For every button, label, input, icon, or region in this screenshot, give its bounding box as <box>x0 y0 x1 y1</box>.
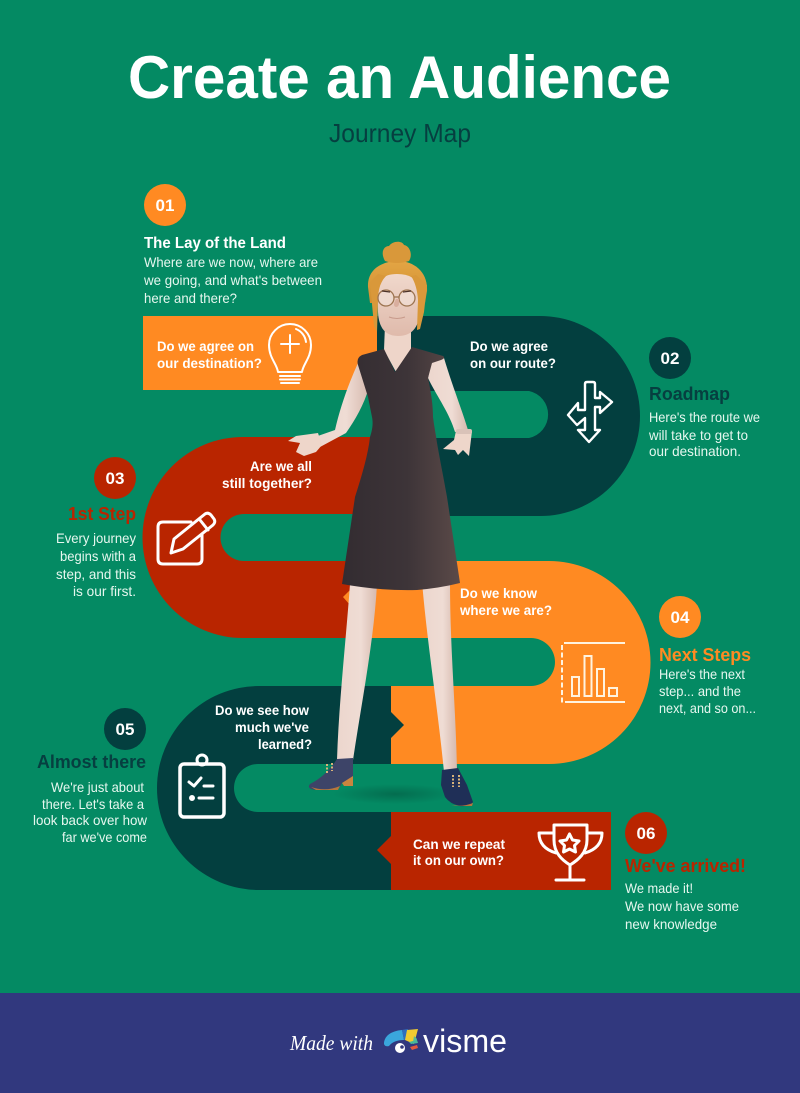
hair strands <box>370 274 427 332</box>
eyes and nose <box>382 291 411 292</box>
step 06 text: new knowledge <box>625 916 717 932</box>
back hair <box>368 261 427 303</box>
step 03 text: begins with a <box>60 548 136 564</box>
footer: Made with <box>289 1031 373 1055</box>
step 04 text: step... and the <box>659 683 741 699</box>
step 01 text: here and there? <box>144 290 237 306</box>
question 04 <box>459 585 552 618</box>
left arm <box>312 363 369 447</box>
step 02 text: Roadmap <box>649 384 730 404</box>
icon: light bulb <box>269 324 311 383</box>
question 02 <box>470 338 556 371</box>
path segment: 03 red <box>142 437 372 638</box>
right hand <box>443 431 472 456</box>
question 06 <box>413 836 505 868</box>
arrow: red to dark <box>377 836 391 864</box>
question 02: on our route? <box>470 355 556 371</box>
step 05 text <box>33 708 148 845</box>
subtitle: Journey Map <box>329 118 471 148</box>
question 01: our destination? <box>157 355 262 371</box>
left hand <box>288 433 322 456</box>
path segment: 05 dark teal <box>157 686 391 890</box>
left leg <box>337 584 377 760</box>
step 04 text <box>659 596 756 716</box>
step 01 text <box>143 184 322 306</box>
watch <box>456 429 472 434</box>
arrow: dark to orange <box>391 712 404 738</box>
question 05 <box>215 702 312 752</box>
step 04 text: 04 <box>671 608 690 627</box>
neck <box>384 325 411 372</box>
question 03 <box>222 458 312 491</box>
right arm <box>428 358 468 432</box>
step 06 text: We now have some <box>625 898 739 914</box>
logo mark <box>384 1029 418 1053</box>
step 03 text: 1st Step <box>68 504 136 524</box>
winding journey path <box>142 316 650 890</box>
question 02: Do we agree <box>470 338 548 354</box>
step 04 text: Next Steps <box>659 645 751 665</box>
step 03 text <box>56 457 136 599</box>
dress <box>342 347 460 590</box>
step 02 text: 02 <box>661 349 679 368</box>
question 03: still together? <box>222 475 312 491</box>
icon: pencil and note <box>158 513 215 564</box>
question 05: much we've <box>235 719 309 735</box>
step 03 text: step, and this <box>56 566 136 582</box>
step 06 text: We made it! <box>625 880 693 896</box>
step 02 text: will take to get to <box>648 427 748 443</box>
icon: trophy <box>539 825 602 880</box>
icon: route arrows <box>568 382 612 442</box>
left shoe <box>309 758 353 790</box>
step 03 text: 03 <box>106 469 124 488</box>
step 05 text: We're just about <box>51 779 144 795</box>
step 05 text: far we've come <box>62 829 147 845</box>
right shoe <box>441 768 473 806</box>
question 05: Do we see how <box>215 702 309 718</box>
step 03 text: Every journey <box>56 530 136 546</box>
step 01 text: we going, and what's between <box>143 272 322 288</box>
icon: clipboard checklist <box>180 755 224 817</box>
footer: visme <box>423 1023 507 1059</box>
step 05 text: 05 <box>116 720 134 739</box>
arrow: red to orange <box>343 590 350 605</box>
path segment: 01 orange <box>143 316 377 390</box>
footer <box>0 993 800 1093</box>
mouth <box>389 317 405 318</box>
hair bun <box>383 242 411 263</box>
step 02 text: our destination. <box>649 443 741 459</box>
question 06: it on our own? <box>413 852 504 868</box>
title: Create an Audience <box>128 44 671 111</box>
question 03: Are we all <box>250 458 312 474</box>
step 05 text: there. Let's take a <box>42 796 144 812</box>
question 04: where we are? <box>459 602 552 618</box>
step 01 text: Where are we now, where are <box>144 254 318 270</box>
step 05 text: look back over how <box>33 812 148 828</box>
step 05 text: Almost there <box>37 752 146 772</box>
path segment: 06 red <box>391 812 611 890</box>
right leg <box>422 582 457 772</box>
step 01 text: 01 <box>156 196 174 215</box>
question 06: Can we repeat <box>413 836 505 852</box>
ground shadow <box>333 784 457 804</box>
step 06 text: 06 <box>637 824 655 843</box>
step 04 text: next, and so on... <box>659 700 756 716</box>
glasses <box>378 290 415 306</box>
step 01 text: The Lay of the Land <box>144 235 286 252</box>
question 04: Do we know <box>460 585 537 601</box>
step 04 text: Here's the next <box>659 666 745 682</box>
step 03 text: is our first. <box>73 583 136 599</box>
question 01: Do we agree on <box>157 338 254 354</box>
face <box>377 274 420 336</box>
step 06 text: We've arrived! <box>625 856 746 876</box>
step 02 text <box>648 337 760 459</box>
path segment: 04 orange <box>350 561 650 764</box>
question 05: learned? <box>258 736 312 752</box>
icon: bar chart <box>562 643 625 703</box>
step 06 text <box>625 812 746 932</box>
question 01 <box>157 338 262 371</box>
step 02 text: Here's the route we <box>649 409 760 425</box>
path segment: 02 dark teal <box>370 316 640 516</box>
character: standing woman <box>288 242 473 806</box>
